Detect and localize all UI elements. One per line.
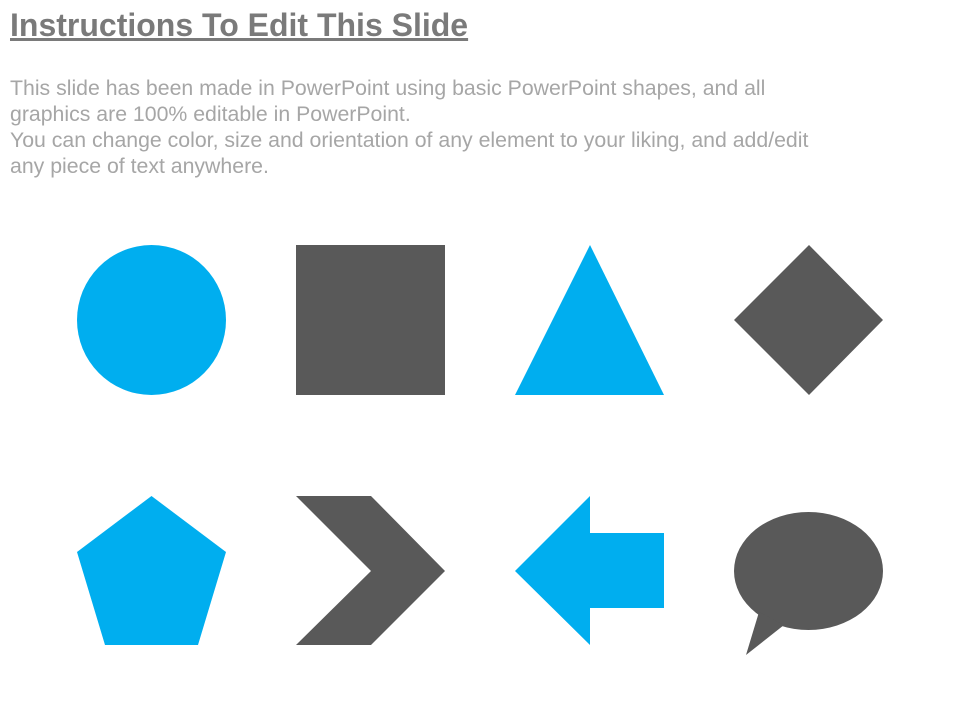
instructions text block: graphics are 100% editable in PowerPoint. xyxy=(10,102,411,126)
title: Instructions To Edit This Slide xyxy=(10,7,468,43)
icon: blue circle xyxy=(77,245,226,395)
icon: blue pentagon xyxy=(77,496,226,645)
icon: dark speech bubble xyxy=(734,512,883,655)
instructions text block: This slide has been made in PowerPoint using basic PowerPoint shapes, and all xyxy=(10,76,765,100)
instructions text block: You can change color, size and orientation of any element to your liking, and add/edit xyxy=(10,128,808,152)
icon: blue triangle xyxy=(515,245,664,395)
icon: dark chevron xyxy=(296,496,445,645)
instructions text block: any piece of text anywhere. xyxy=(10,154,269,178)
icon: dark diamond xyxy=(734,245,883,395)
icon: blue left arrow xyxy=(515,496,664,645)
instructions text block xyxy=(10,76,808,178)
icon: dark square xyxy=(296,245,445,395)
